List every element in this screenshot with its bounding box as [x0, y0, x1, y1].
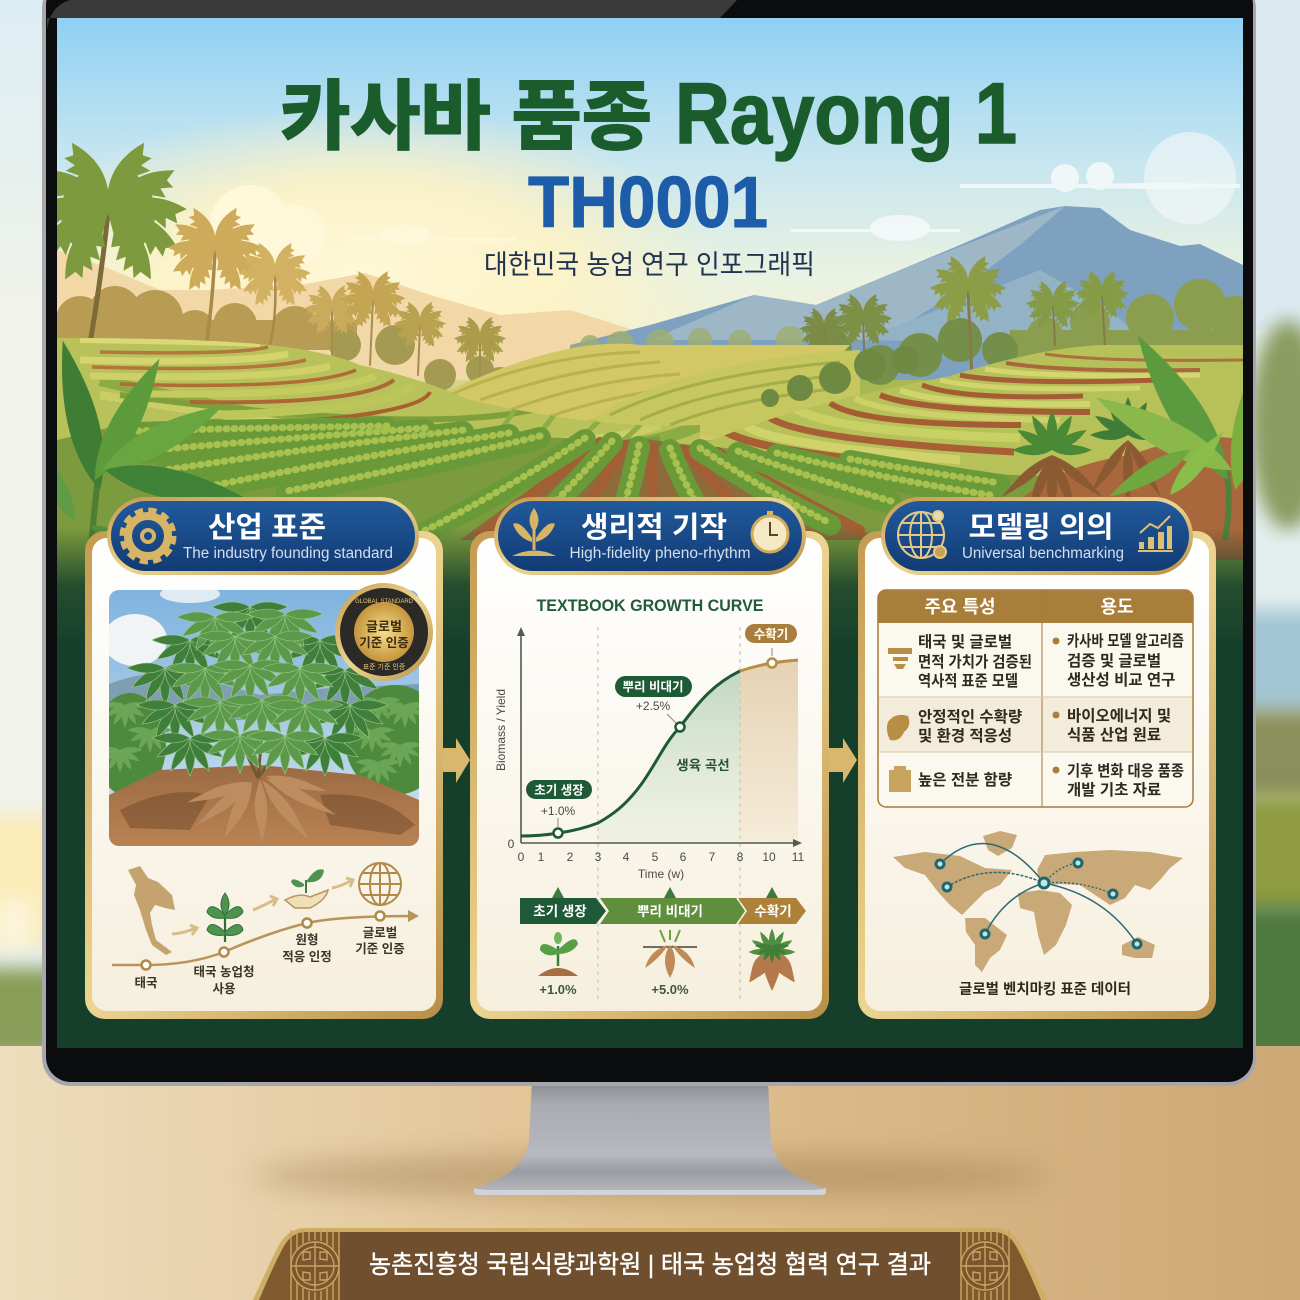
- blue mountain: [570, 206, 1243, 380]
- harvest callout: [745, 624, 797, 656]
- icon: globe: [359, 863, 401, 905]
- axis numbers: 3: [595, 850, 602, 864]
- left column text: 높은 전분 함량: [918, 771, 1012, 789]
- icon: globe: [898, 511, 946, 558]
- timeline labels: 기준 인증: [355, 941, 405, 956]
- harvest callout: 수확기: [754, 626, 788, 642]
- axis numbers: Time (w): [638, 867, 684, 881]
- axis numbers: 5: [652, 850, 659, 864]
- photo: cassava plant: [109, 590, 419, 846]
- arrow: panel 1 to 2: [443, 738, 470, 783]
- icon: hand with sprout: [285, 869, 328, 908]
- left column text: [918, 633, 1032, 789]
- header pill: The industry founding standard: [183, 545, 393, 562]
- axis numbers: 11: [792, 850, 805, 864]
- axis numbers: 2: [567, 850, 574, 864]
- right column text: 검증 및 글로벌: [1067, 652, 1161, 670]
- warm clouds left: [210, 185, 515, 265]
- header pill: 생리적 기작: [581, 511, 727, 544]
- medal badge: 표준 기준 인증: [363, 662, 406, 671]
- medal badge: 글로벌: [366, 619, 402, 634]
- growth curve chart: [494, 624, 805, 1000]
- panel: physiological origin: [470, 497, 829, 1019]
- header pill: [494, 497, 806, 575]
- panel: modelling significance: [858, 497, 1216, 1019]
- left column text: 역사적 표준 모델: [918, 672, 1018, 690]
- right column text: 카사바 모델 알고리즘: [1067, 632, 1184, 650]
- timeline labels: [134, 926, 405, 996]
- leaves: [127, 602, 388, 776]
- trait table: 주요 특성: [924, 597, 996, 617]
- icon: seedling: [538, 932, 578, 976]
- card frame: [85, 531, 443, 1019]
- left terraces: [57, 338, 700, 444]
- screen: landscape illustration: [0, 18, 1293, 1050]
- palm trees: [28, 139, 1129, 400]
- right column text: 식품 산업 원료: [1067, 726, 1161, 744]
- continents: [893, 831, 1183, 972]
- timeline labels: 적응 인정: [282, 950, 332, 964]
- subtitle: 대한민국 농업 연구 인포그래픽: [484, 250, 815, 280]
- phase percentages: [539, 982, 689, 997]
- map nodes: [936, 859, 1141, 948]
- header pill: 산업 표준: [208, 511, 326, 544]
- banana plant right: [1096, 336, 1243, 540]
- axis numbers: 7: [709, 850, 716, 864]
- medal badge: [335, 583, 433, 681]
- growth curve chart: 생육 곡선: [676, 758, 730, 773]
- title: [280, 66, 1017, 162]
- right column text: 개발 기초 자료: [1067, 781, 1161, 799]
- timeline labels: 글로벌: [363, 926, 397, 940]
- header pill: [881, 497, 1193, 575]
- cassava plants and soil right: [998, 397, 1243, 560]
- icon: Thailand map: [128, 866, 175, 955]
- tree lines: [57, 279, 1243, 390]
- icon: bulking root: [643, 930, 697, 978]
- root bulking callout: [615, 676, 692, 723]
- card frame: [858, 531, 1216, 1019]
- axis numbers: 1: [538, 850, 545, 864]
- connection lines: [940, 843, 1137, 944]
- right column text: 기후 변화 대응 품종: [1067, 762, 1184, 780]
- left column text: 면적 가치가 검증된: [918, 653, 1032, 671]
- footer plaque: 농촌진흥청 국립식량과학원 | 태국 농업청 협력 연구 결과: [369, 1251, 931, 1279]
- axis numbers: 0: [518, 850, 525, 864]
- timeline labels: 태국 농업청: [194, 964, 254, 979]
- card frame: [470, 531, 829, 1019]
- axis numbers: 8: [737, 850, 744, 864]
- root bulking callout: 뿌리 비대기: [623, 679, 683, 694]
- early growth callout: +1.0%: [541, 804, 576, 818]
- small arrows: [172, 878, 353, 935]
- right column text: 바이오에너지 및: [1067, 707, 1171, 725]
- medal badge: GLOBAL STANDARD: [355, 599, 414, 605]
- phase arrows: 뿌리 비대기: [637, 904, 703, 919]
- axis numbers: 6: [680, 850, 687, 864]
- right column text: [1052, 632, 1184, 799]
- icon: sprout: [512, 508, 556, 556]
- phase arrows: [520, 887, 806, 924]
- stand shadow: [250, 1154, 1050, 1198]
- icon: bar chart: [1138, 516, 1173, 551]
- centre terraced hills: [430, 344, 919, 440]
- monitor frame: [42, 0, 1256, 1086]
- early growth callout: [526, 780, 592, 828]
- axis numbers: 10: [762, 850, 776, 864]
- timeline: [112, 863, 419, 996]
- curve: [112, 916, 415, 965]
- ornament right: [961, 1230, 1009, 1300]
- header pill: High-fidelity pheno-rhythm: [570, 545, 750, 562]
- header pill: 모델링 의의: [968, 511, 1114, 544]
- root bulking callout: +2.5%: [636, 699, 671, 713]
- timeline labels: 원형: [295, 932, 319, 947]
- title: 카사바 품종: [280, 75, 652, 160]
- icon: harvested cassava: [743, 928, 801, 991]
- icon: leaf sprout: [207, 893, 243, 942]
- table icons: [887, 648, 912, 792]
- early growth callout: 초기 생장: [534, 782, 584, 798]
- desk surface: [0, 1046, 1300, 1300]
- axis numbers: [494, 689, 805, 881]
- axis numbers: 4: [623, 850, 630, 864]
- map caption: 글로벌 벤치마킹 표준 데이터: [959, 981, 1131, 998]
- footer plaque: [253, 1228, 1047, 1300]
- phase arrows: 수확기: [754, 903, 792, 919]
- icon: stopwatch: [752, 511, 788, 552]
- arrow: panel 2 to 3: [829, 738, 857, 783]
- banana plant left: [57, 340, 243, 540]
- phase arrows: 초기 생장: [533, 904, 587, 919]
- timeline labels: 태국: [134, 975, 158, 990]
- curve points: [554, 658, 776, 838]
- phase percentages: +1.0%: [539, 982, 577, 997]
- phase percentages: +5.0%: [651, 982, 689, 997]
- trait table: 용도: [1100, 597, 1134, 617]
- chart title: TEXTBOOK GROWTH CURVE: [536, 596, 764, 615]
- ornament left: [291, 1230, 339, 1300]
- tan far mountains: [57, 250, 640, 380]
- dark green lower panel: [57, 532, 1243, 1048]
- nodes: [142, 912, 384, 970]
- title: Rayong 1: [675, 66, 1017, 162]
- axis numbers: 0: [508, 837, 515, 851]
- monitor stand: [474, 1082, 826, 1195]
- trait table: [878, 590, 1193, 807]
- axis numbers: Biomass / Yield: [494, 689, 508, 771]
- header pill: Universal benchmarking: [962, 545, 1124, 562]
- left column text: 및 환경 적응성: [918, 727, 1012, 745]
- clouds: [790, 132, 1240, 241]
- foreground crop rows: [57, 417, 1243, 584]
- header pill: [107, 497, 419, 575]
- left column text: 태국 및 글로벌: [918, 633, 1012, 651]
- variety code: TH0001: [528, 163, 768, 243]
- timeline labels: 사용: [212, 982, 236, 996]
- right column text: 생산성 비교 연구: [1067, 671, 1175, 689]
- cassava roots: [188, 776, 336, 842]
- left column text: 안정적인 수확량: [918, 708, 1022, 726]
- panel: industry standard: [85, 497, 445, 1019]
- right terraces: [708, 345, 1243, 476]
- medal badge: 기준 인증: [359, 635, 409, 650]
- icon: gear: [123, 511, 173, 561]
- world map: [893, 831, 1183, 972]
